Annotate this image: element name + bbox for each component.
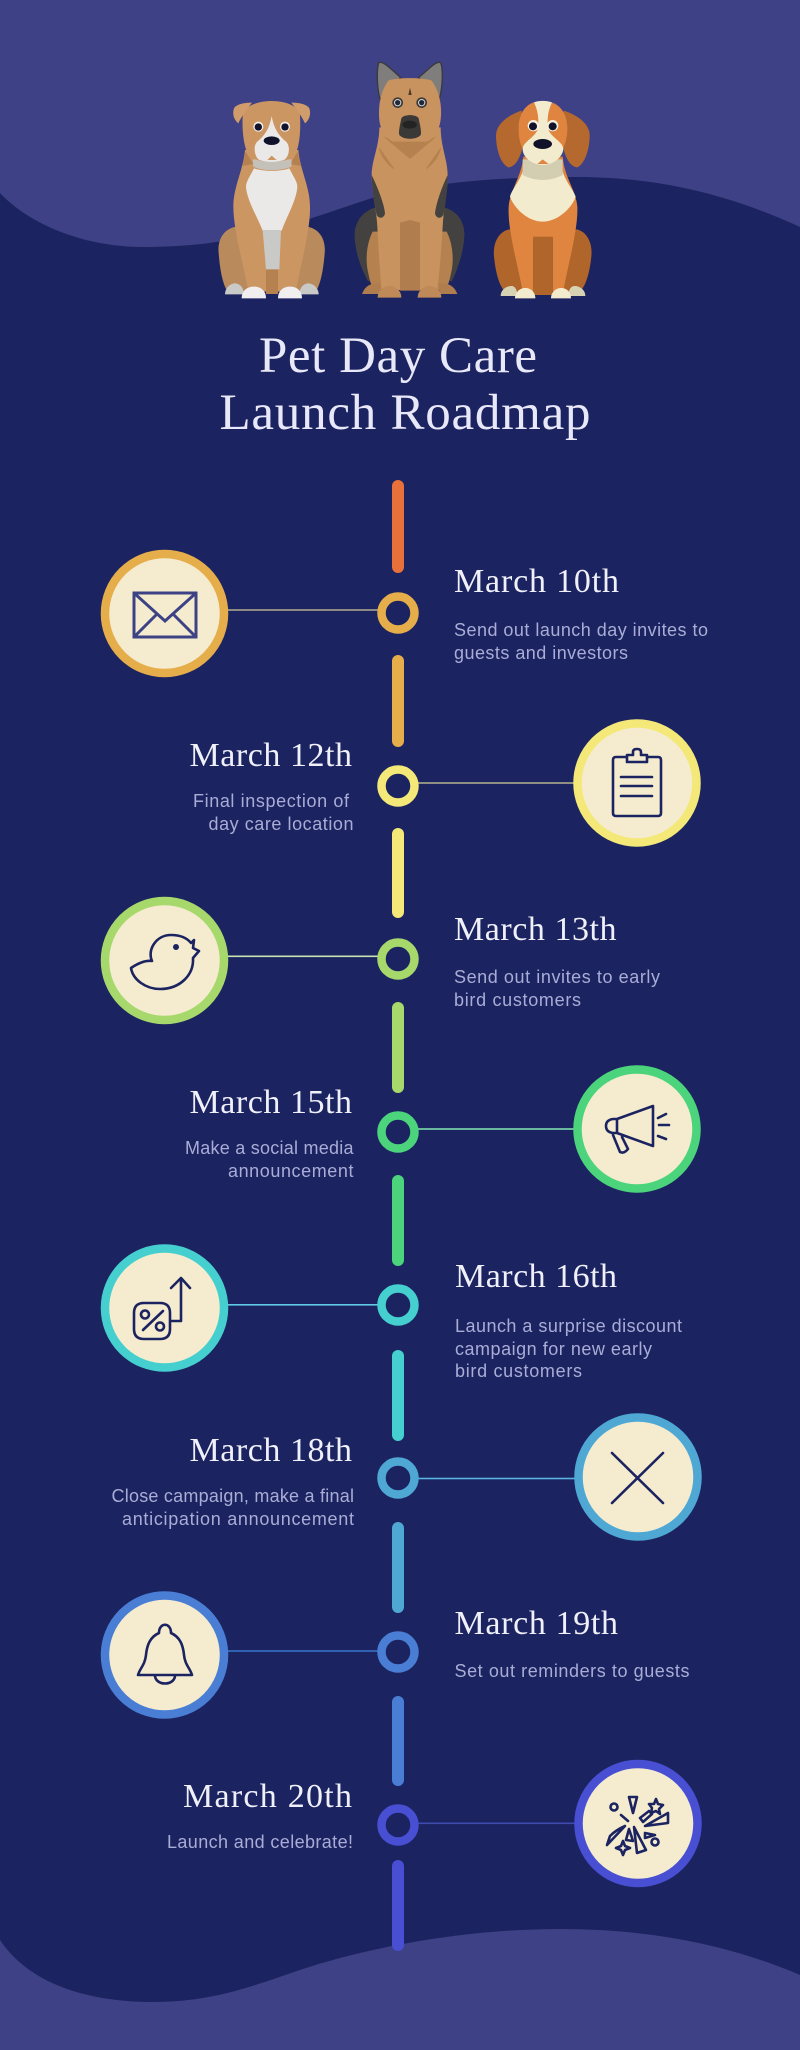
- milestone: March 10th: [105, 554, 708, 673]
- timeline bar: indigo: [392, 1860, 404, 1951]
- description: campaign for new early: [455, 1339, 652, 1359]
- timeline bar: green: [392, 1175, 404, 1266]
- timeline node: [382, 1288, 414, 1322]
- description: guests and investors: [454, 643, 628, 663]
- connector line: [226, 956, 380, 957]
- description: [454, 967, 660, 1010]
- bottom wave background: [0, 1929, 800, 2050]
- date: March 19th: [454, 1605, 618, 1642]
- icon: bird: [105, 901, 224, 1020]
- connector line: [226, 609, 380, 611]
- timeline bar: gold: [392, 655, 404, 747]
- icon: fireworks: [578, 1764, 698, 1883]
- milestone: March 13th: [105, 901, 660, 1020]
- title: [220, 328, 590, 441]
- timeline node: [382, 1462, 414, 1494]
- description: [454, 620, 708, 663]
- date: March 13th: [454, 911, 616, 948]
- milestone: March 18th: [112, 1418, 698, 1536]
- date: March 15th: [190, 1084, 352, 1121]
- icon: discount tag with arrow: [105, 1248, 224, 1368]
- timeline node: [382, 1636, 414, 1668]
- description: bird customers: [455, 1361, 582, 1381]
- icon: envelope: [105, 554, 224, 673]
- icon: cross: [578, 1418, 698, 1536]
- description: [193, 791, 354, 834]
- date: March 20th: [183, 1778, 352, 1815]
- description: Make a social media: [185, 1138, 354, 1158]
- top wave background: [0, 0, 800, 247]
- timeline bar: yellow: [392, 828, 404, 918]
- description: Launch a surprise discount: [455, 1316, 682, 1336]
- connector line: [416, 1822, 575, 1824]
- connector line: [416, 782, 575, 784]
- milestone: March 15th: [185, 1070, 696, 1188]
- dog: german shepherd: [355, 62, 464, 298]
- timeline node: [382, 1808, 414, 1842]
- date: March 10th: [454, 563, 619, 600]
- timeline bar: teal: [392, 1350, 404, 1441]
- description: Launch and celebrate!: [167, 1832, 353, 1852]
- dog: boxer: [218, 101, 325, 298]
- description: [455, 1316, 682, 1381]
- timeline node: [382, 596, 414, 630]
- description: Send out invites to early: [454, 967, 660, 987]
- description: Set out reminders to guests: [454, 1661, 690, 1681]
- milestone: March 12th: [190, 724, 696, 842]
- icon: clipboard: [578, 724, 696, 842]
- milestone: March 19th: [105, 1596, 690, 1714]
- timeline bar: light green: [392, 1002, 404, 1093]
- icon: bell: [105, 1596, 224, 1714]
- milestone: March 20th: [167, 1764, 698, 1883]
- title: Launch Roadmap: [220, 385, 590, 441]
- timeline bar: blue: [392, 1696, 404, 1786]
- dog: beagle: [494, 101, 592, 298]
- description: Final inspection of: [193, 791, 350, 811]
- timeline node: [382, 942, 414, 976]
- connector line: [416, 1128, 575, 1130]
- description: Close campaign, make a final: [112, 1486, 354, 1506]
- icon: megaphone: [578, 1070, 696, 1188]
- description: bird customers: [454, 990, 581, 1010]
- description: [185, 1138, 354, 1181]
- connector line: [226, 1650, 380, 1652]
- milestone: March 16th: [105, 1248, 682, 1381]
- connector line: [226, 1304, 380, 1306]
- title: Pet Day Care: [259, 328, 537, 384]
- timeline bar: orange: [392, 480, 404, 573]
- description: day care location: [208, 814, 354, 834]
- description: Send out launch day invites to: [454, 620, 708, 640]
- description: anticipation announcement: [122, 1509, 354, 1529]
- timeline node: [382, 1116, 414, 1148]
- description: [112, 1486, 354, 1529]
- timeline node: [382, 770, 414, 802]
- date: March 18th: [190, 1432, 352, 1469]
- timeline bar: sky blue: [392, 1522, 404, 1613]
- date: March 12th: [190, 737, 352, 774]
- illustration: three sitting dogs: [218, 62, 592, 298]
- date: March 16th: [455, 1258, 617, 1295]
- description: announcement: [228, 1161, 354, 1181]
- connector line: [416, 1478, 575, 1479]
